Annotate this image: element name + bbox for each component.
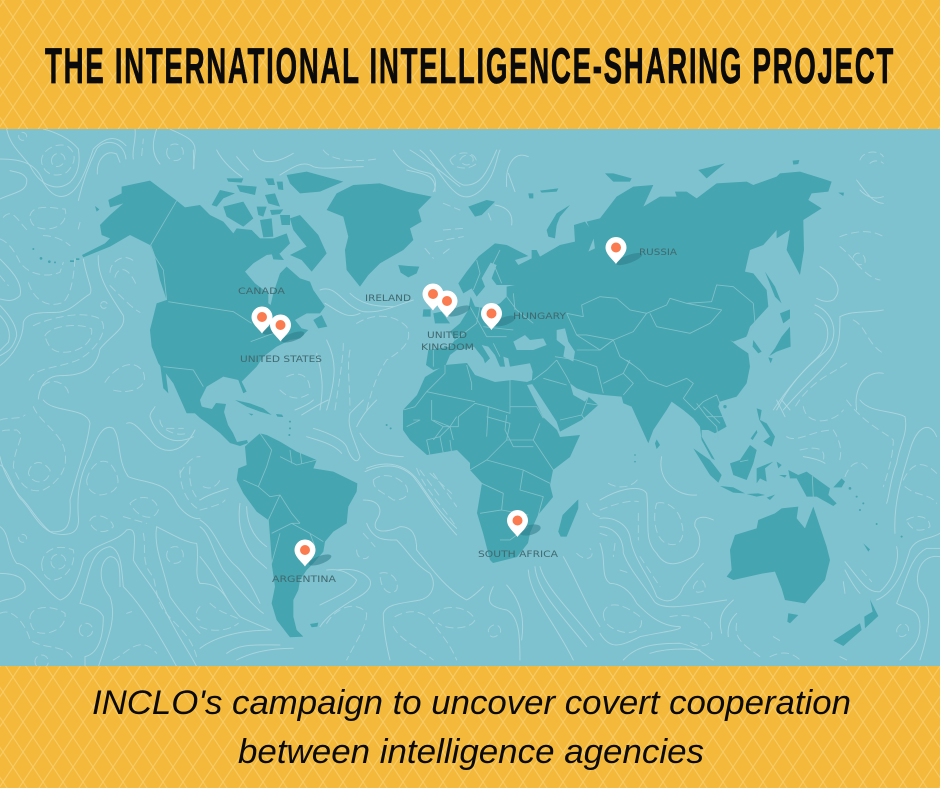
label: United Kingdom: KINGDOM — [421, 343, 474, 353]
Baja and Central America — [195, 403, 248, 446]
subtitle: INCLO's campaign to uncover covert cooperation — [92, 684, 851, 722]
label: Russia: RUSSIA — [639, 248, 678, 258]
Falklands — [310, 623, 318, 627]
pin: United States — [270, 314, 291, 342]
Greenland — [327, 183, 432, 287]
label: United States: UNITED STATES — [240, 355, 322, 365]
panel: top banner — [0, 0, 940, 129]
country borders — [151, 201, 813, 563]
pin shadows — [261, 250, 644, 568]
Africa — [403, 363, 580, 563]
pin: Ireland — [422, 284, 444, 310]
pin: South Africa — [507, 510, 528, 537]
panel: world map — [0, 129, 940, 668]
Aleutian islands — [32, 248, 79, 263]
Eurasia — [426, 172, 832, 460]
pin: Canada — [252, 306, 272, 334]
label: United Kingdom: UNITED — [427, 331, 467, 341]
label: South Africa: SOUTH AFRICA — [478, 550, 559, 560]
pin: Hungary — [481, 303, 502, 330]
pin: Argentina — [294, 540, 316, 566]
label: Canada: CANADA — [238, 287, 286, 297]
land masses — [32, 160, 903, 646]
Arctic islands and Newfoundland — [95, 172, 343, 328]
panel: bottom banner — [0, 666, 940, 788]
New Zealand — [833, 599, 878, 646]
Australia — [727, 507, 830, 603]
label: Hungary: HUNGARY — [513, 312, 567, 322]
country labels — [238, 248, 678, 585]
Maritime Southeast Asia — [634, 405, 903, 552]
inland seas — [513, 328, 575, 362]
South America — [237, 433, 357, 637]
contour lines: ocean texture — [0, 129, 940, 668]
Tasmania — [787, 613, 798, 623]
North America — [82, 181, 325, 413]
Caribbean islands — [235, 400, 392, 436]
Japan, Sakhalin and Arctic Russia islands — [468, 160, 844, 363]
Iceland — [398, 265, 419, 277]
British Isles — [423, 309, 450, 323]
Baja peninsula — [160, 363, 168, 393]
subtitle: between intelligence agencies — [238, 733, 704, 771]
label: Ireland: IRELAND — [365, 294, 411, 304]
label: Argentina: ARGENTINA — [272, 575, 337, 585]
pin: United Kingdom — [436, 290, 458, 318]
pin: Russia — [606, 237, 626, 264]
Madagascar — [558, 499, 578, 537]
